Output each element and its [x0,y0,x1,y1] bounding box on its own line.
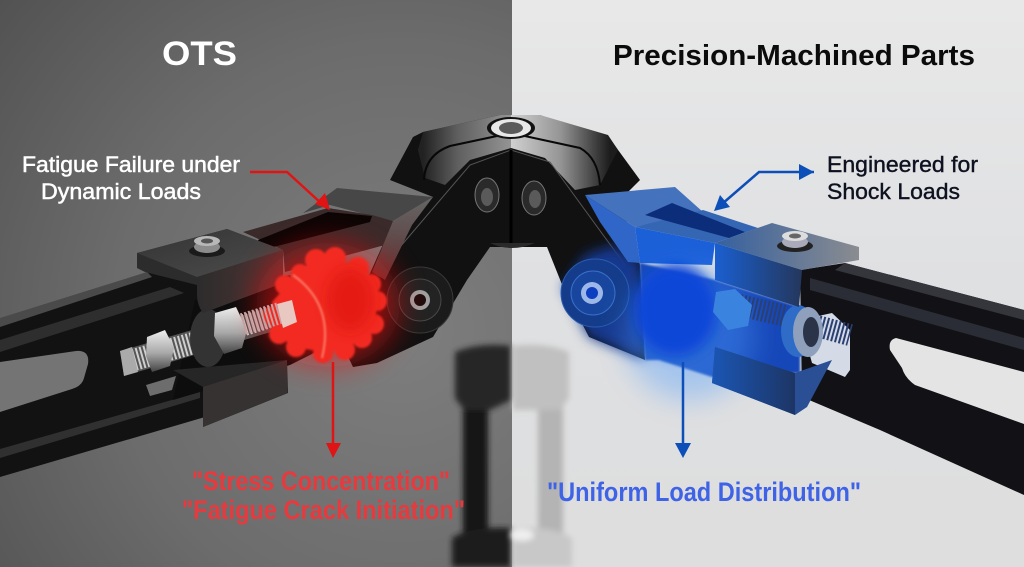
left pivot bearing [387,267,453,333]
left rail [0,272,285,477]
blurred background post, right half [510,345,572,567]
glowing thread end [243,313,280,324]
right rail assembly [800,263,1024,495]
left threaded rod [120,302,294,376]
right rail inner window [800,313,850,377]
arrow: red down to stress label [326,362,341,458]
right lower clamp [712,347,832,415]
callout text: fatigue failure: Dynamic Loads [41,179,201,204]
left cavity [173,275,320,400]
right cavity [640,263,800,377]
right threaded rod [739,305,850,335]
arrow: blue callout [714,164,814,211]
hub top plate, right [511,115,618,190]
label: uniform load distribution: "Uniform Load Distribution" [547,477,861,507]
right bar front [635,227,715,265]
central hub [340,115,645,367]
right blue bracket [561,187,800,377]
left clamp bolt [189,245,225,257]
left block top [303,188,433,221]
heading: Precision-Machined Parts: Precision-Machined Parts [613,40,975,72]
glowing bolt cap [277,300,297,328]
right block top [585,187,703,227]
red blob [263,247,387,363]
right upper clamp [715,223,859,270]
left upper clamp [137,229,283,313]
blue load glow [625,264,755,400]
left facet [372,197,433,280]
left bracket arm [173,188,433,400]
left bar [243,208,393,272]
label: stress concentration and fatigue crack: "Fatigue Crack Initiation" [182,495,465,525]
red stress glow [243,243,400,367]
background: light right half [512,0,1024,567]
left slot [258,212,372,250]
right clamp bolt [777,240,813,252]
right bar top [635,210,758,243]
left lower slot [146,376,176,396]
right hardware [712,223,859,415]
left lower clamp [173,360,288,427]
right rail window [890,338,1024,424]
arrow: blue down to load label [675,362,691,458]
hub screws [475,178,499,212]
arrow: red callout [250,172,330,210]
left hardware [120,229,294,427]
left rail assembly [0,272,285,477]
right pivot bearing [561,259,629,327]
left rail window [0,351,88,412]
left second nut [214,307,247,354]
right slot [645,203,745,238]
heading: OTS: OTS [162,35,237,73]
right rail [800,263,1024,495]
callout text: fatigue failure: Fatigue Failure under [22,152,240,177]
background: dark left half [0,0,512,567]
red blob shading [326,268,374,332]
left washer [190,309,226,367]
hub bearing [487,117,535,139]
left nut [146,330,174,372]
hub top plate, left [418,115,511,185]
blurred background post, left half [452,345,511,567]
callout text: engineered for shock loads: Shock Loads [827,179,960,204]
right arm tint [563,245,645,360]
right facet [585,195,640,263]
callout text: engineered for shock loads: Engineered for [827,152,978,177]
label: stress concentration and fatigue crack: "Stress Concentration" [192,466,450,496]
hub body [340,115,645,367]
right nut [713,289,752,330]
right washer [781,305,815,357]
